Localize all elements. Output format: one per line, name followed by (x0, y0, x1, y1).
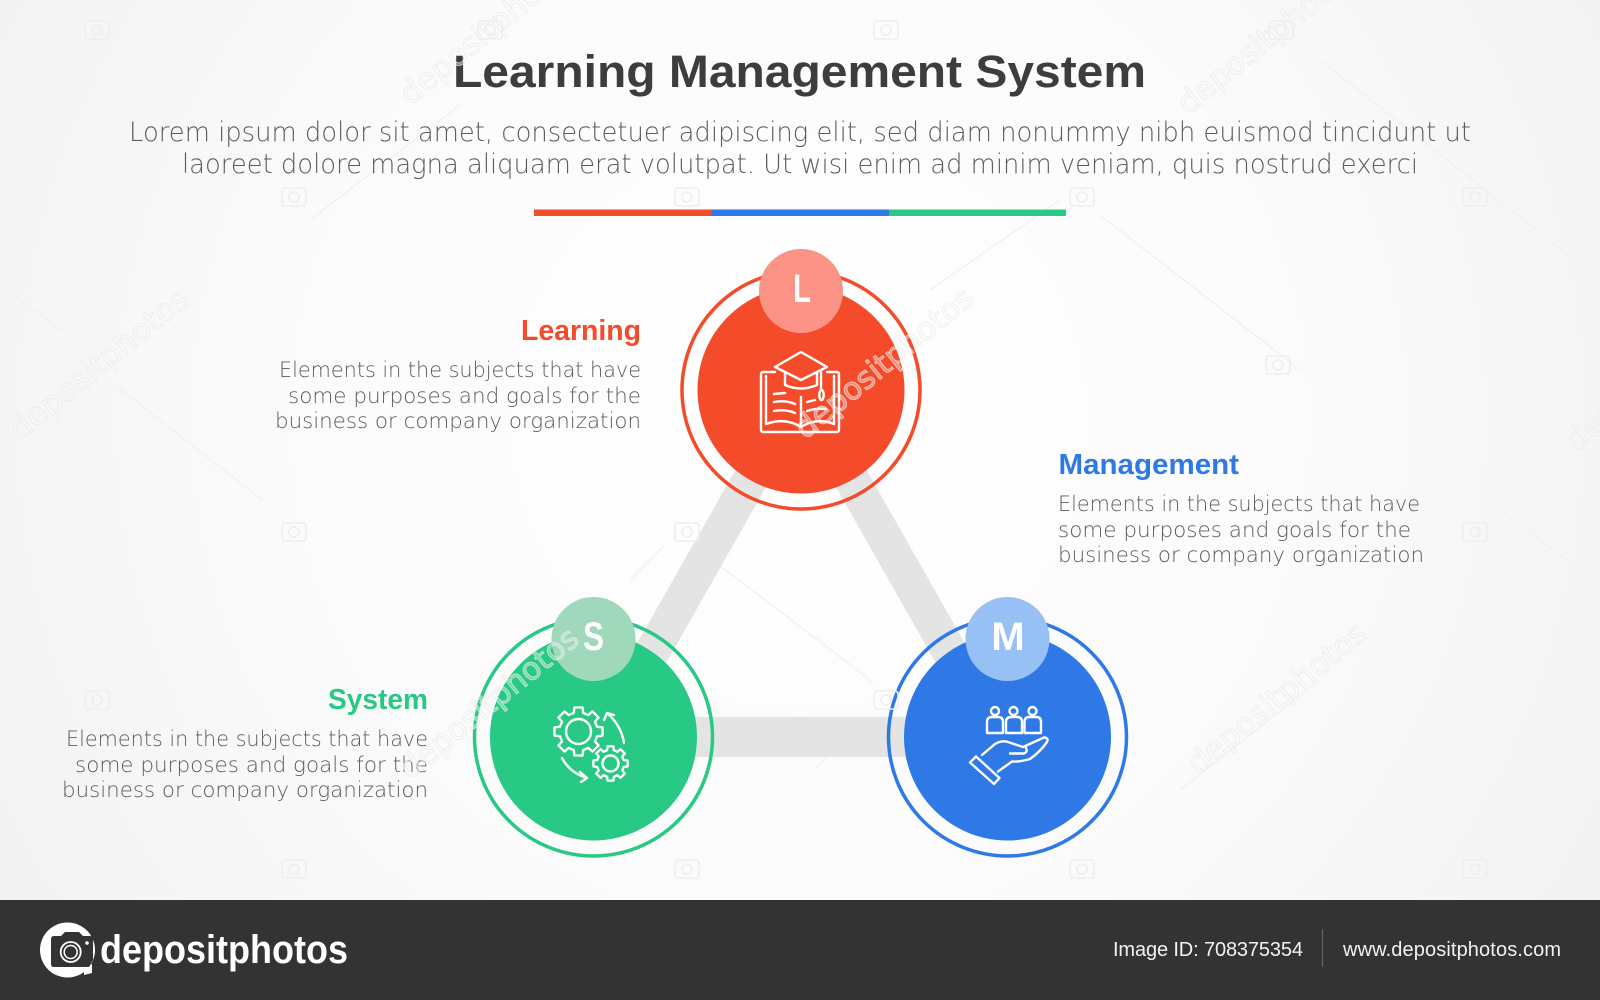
management letter badge: M (991, 615, 1025, 659)
learning letter badge: L (793, 267, 811, 311)
website: www.depositphotos.com (1342, 939, 1561, 961)
watermarks (3, 0, 1600, 786)
management outer ring (888, 618, 1126, 856)
system description: Elements in the subjects that have (66, 727, 428, 752)
panel: system node (474, 597, 712, 856)
footer divider (1322, 929, 1323, 967)
learning letter badge (759, 249, 843, 333)
management description: some purposes and goals for the (1058, 518, 1411, 543)
label: system (62, 684, 428, 803)
system disc (490, 634, 697, 840)
panel: learning node (682, 249, 920, 509)
learning heading: Learning (521, 315, 641, 347)
system description (62, 727, 428, 803)
title: Learning Management System (453, 46, 1146, 97)
management heading: Management (1058, 449, 1239, 481)
learning description: some purposes and goals for the (288, 384, 641, 409)
management description: Elements in the subjects that have (1058, 492, 1420, 517)
icon: hand holding people (970, 707, 1048, 784)
watermarks: depositphotos (788, 280, 981, 446)
management disc (904, 634, 1111, 840)
icon: gears with arrows (554, 707, 628, 782)
tricolor divider (534, 210, 1066, 216)
management description (1058, 492, 1424, 568)
management letter badge (966, 597, 1050, 681)
watermarks: depositphotos (393, 620, 586, 786)
label: learning (275, 315, 641, 434)
triangle connector (594, 390, 1007, 737)
label: management (1058, 449, 1424, 568)
system letter badge (552, 597, 636, 681)
system description: business or company organization (62, 778, 428, 803)
learning description (275, 358, 641, 434)
system heading: System (328, 684, 428, 716)
system description: some purposes and goals for the (75, 753, 428, 778)
icon: camera logo (40, 922, 95, 978)
subtitle (129, 117, 1471, 180)
learning description: business or company organization (275, 409, 641, 434)
management description: business or company organization (1058, 543, 1424, 568)
learning description: Elements in the subjects that have (279, 358, 641, 383)
panel: management node (888, 597, 1126, 856)
logo wordmark: depositphotos (100, 928, 348, 972)
icon: book and graduation cap (761, 352, 839, 432)
learning disc (698, 286, 904, 494)
watermarks: depositphotos (1181, 615, 1374, 781)
footer bar (0, 900, 1600, 1000)
system letter badge: S (583, 615, 604, 659)
small camera marks (85, 21, 1487, 878)
watermarks: depositphotos (3, 281, 196, 447)
system outer ring (474, 618, 712, 856)
subtitle: Lorem ipsum dolor sit amet, consectetuer adipiscing elit, sed diam nonummy nibh euismod tincidunt ut (129, 117, 1471, 148)
learning outer ring (682, 271, 920, 509)
subtitle: laoreet dolore magna aliquam erat volutpat. Ut wisi enim ad minim veniam, quis nostrud exerci (182, 149, 1418, 180)
image id: Image ID: 708375354 (1113, 939, 1303, 961)
